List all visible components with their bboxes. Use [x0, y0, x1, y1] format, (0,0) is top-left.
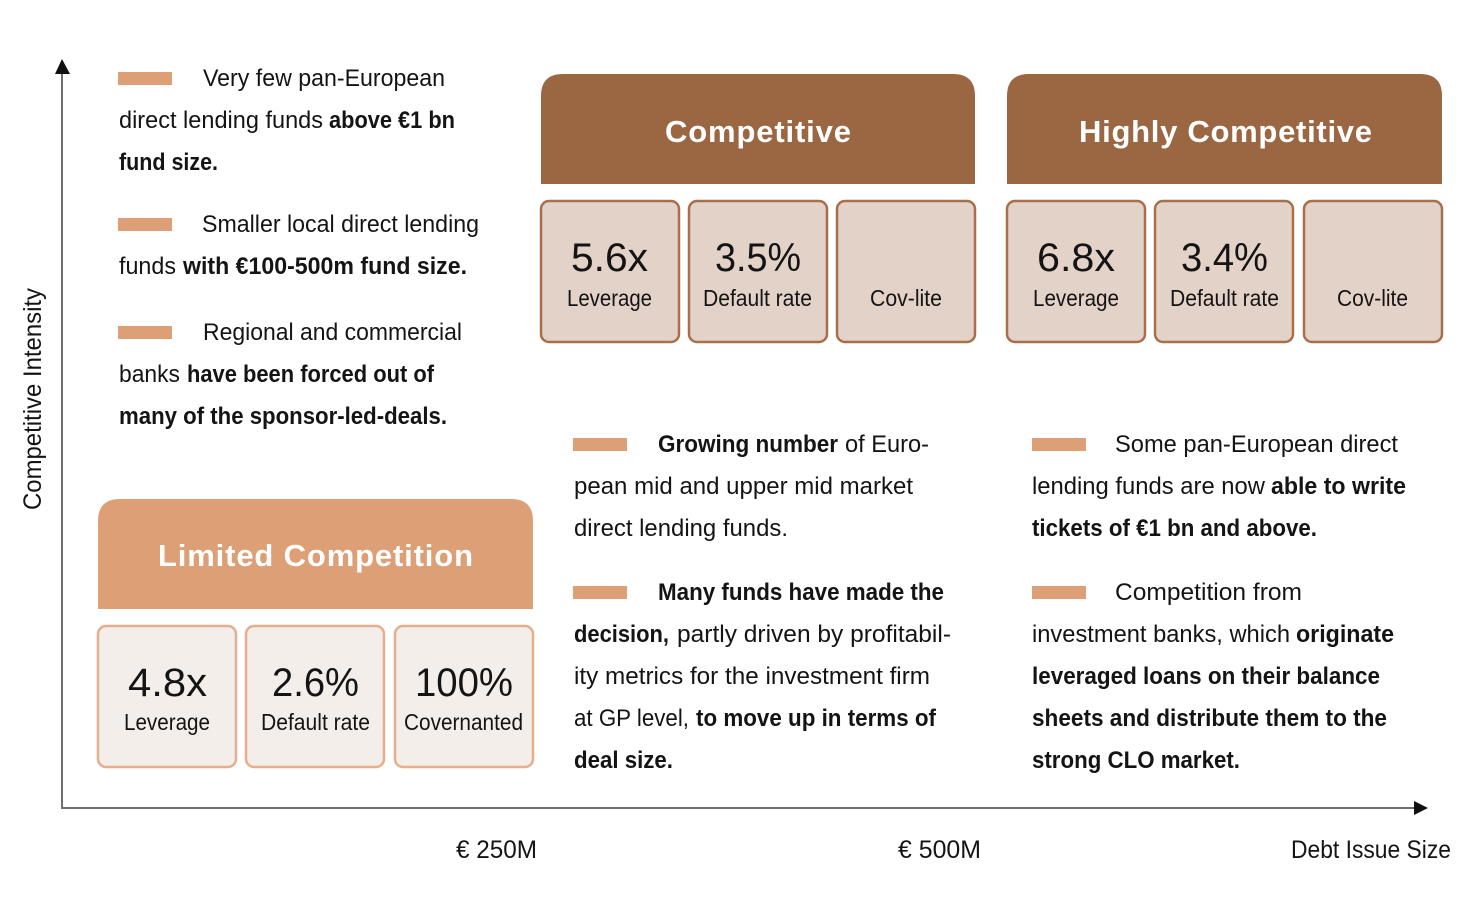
text block: competitive notes: decision,: [574, 621, 669, 648]
text block: competitive notes: at GP level,: [574, 705, 689, 732]
text block: competitive notes: direct lending funds.: [574, 515, 788, 542]
text block: limited competition notes: direct lending funds: [119, 107, 323, 134]
text block: limited competition notes: banks: [119, 361, 180, 388]
text block: highly competitive notes: strong CLO market.: [1032, 747, 1240, 774]
text block: limited competition notes: with €100-500m fund size.: [182, 253, 467, 280]
x axis tick: 500M: € 500M: [898, 836, 981, 864]
text block: competitive notes: Many funds have made the: [658, 579, 944, 606]
stat: leverage 6.8x: [1007, 201, 1145, 342]
text block: highly competitive notes: tickets of €1 bn and above.: [1032, 515, 1317, 542]
text block: limited competition notes: Very few pan-European: [203, 65, 445, 92]
text block: highly competitive notes: [1032, 431, 1406, 774]
text block: limited competition notes: have been forced out of: [187, 361, 435, 388]
text block: competitive notes: of Euro-: [845, 431, 929, 458]
text block: competitive notes: [573, 431, 951, 774]
stat: leverage 5.6x: 5.6x: [571, 236, 648, 280]
stat: default rate 2.6%: [246, 626, 384, 767]
x axis tick: 250M: € 250M: [456, 836, 537, 864]
heading: highly competitive: Highly Competitive: [1079, 114, 1372, 149]
heading: limited competition: Limited Competition: [158, 538, 473, 573]
stat: leverage 4.8x: Leverage: [124, 709, 210, 735]
text block: highly competitive notes: sheets and distribute them to the: [1032, 705, 1387, 732]
panel: highly competitive: [1007, 74, 1442, 342]
stat: leverage 4.8x: [98, 626, 236, 767]
text block: competitive notes: to move up in terms of: [696, 705, 937, 732]
stat: covenanted 100%: [395, 626, 533, 767]
text block: limited competition notes: funds: [119, 253, 176, 280]
text block: competitive notes: ity metrics for the investment firm: [574, 663, 930, 690]
text block: competitive notes: partly driven by profitabil-: [677, 621, 951, 648]
stat: leverage 6.8x: 6.8x: [1037, 236, 1115, 280]
text block: limited competition notes: [118, 65, 479, 430]
text block: highly competitive notes: originate: [1296, 621, 1394, 648]
text block: competitive notes: Growing number: [658, 431, 838, 458]
stat: covenanted 100%: Covernanted: [404, 709, 523, 735]
stat: default rate 3.4%: 3.4%: [1181, 236, 1268, 280]
y axis label: Competitive Intensity: [19, 288, 47, 510]
text block: competitive notes: deal size.: [574, 747, 673, 774]
stat: cov-lite: [837, 201, 975, 342]
heading: highly competitive: [1007, 74, 1442, 184]
stat: cov-lite: Cov-lite: [870, 285, 942, 311]
stat: default rate 3.5%: Default rate: [703, 285, 812, 311]
heading: competitive: [541, 74, 975, 184]
stat: leverage 4.8x: 4.8x: [128, 661, 207, 705]
text block: limited competition notes: Smaller local direct lending: [202, 211, 479, 238]
x axis arrow: [61, 801, 1428, 815]
text block: limited competition notes: Regional and commercial: [203, 319, 462, 346]
panel: competitive: [541, 74, 975, 342]
stat: default rate 3.4%: [1155, 201, 1293, 342]
stat: cov-lite: Cov-lite: [1337, 285, 1408, 311]
stat: default rate 3.4%: Default rate: [1170, 285, 1279, 311]
heading: limited competition: [98, 499, 533, 609]
text block: limited competition notes: above €1 bn: [329, 107, 455, 134]
text block: highly competitive notes: investment banks, which: [1032, 621, 1290, 648]
text block: highly competitive notes: leveraged loans on their balance: [1032, 663, 1380, 690]
text block: limited competition notes: fund size.: [119, 149, 218, 176]
stat: covenanted 100%: 100%: [415, 661, 513, 705]
stat: cov-lite: [1304, 201, 1442, 342]
stat: leverage 5.6x: [541, 201, 679, 342]
stat: default rate 2.6%: 2.6%: [272, 661, 359, 705]
heading: competitive: Competitive: [665, 114, 851, 149]
stat: default rate 2.6%: Default rate: [261, 709, 370, 735]
text block: highly competitive notes: able to write: [1271, 473, 1406, 500]
stat: default rate 3.5%: [689, 201, 827, 342]
text block: highly competitive notes: lending funds are now: [1032, 473, 1265, 500]
x axis label: Debt Issue Size: [1291, 836, 1451, 864]
text block: competitive notes: pean mid and upper mid market: [574, 473, 913, 500]
stat: leverage 6.8x: Leverage: [1033, 285, 1119, 311]
stat: leverage 5.6x: Leverage: [567, 285, 652, 311]
text block: limited competition notes: many of the sponsor-led-deals.: [119, 403, 447, 430]
text block: highly competitive notes: Some pan-European direct: [1115, 431, 1398, 458]
text block: highly competitive notes: Competition from: [1115, 579, 1302, 606]
stat: default rate 3.5%: 3.5%: [715, 236, 801, 280]
panel: limited competition: [98, 499, 533, 767]
y axis arrow: [55, 59, 70, 809]
